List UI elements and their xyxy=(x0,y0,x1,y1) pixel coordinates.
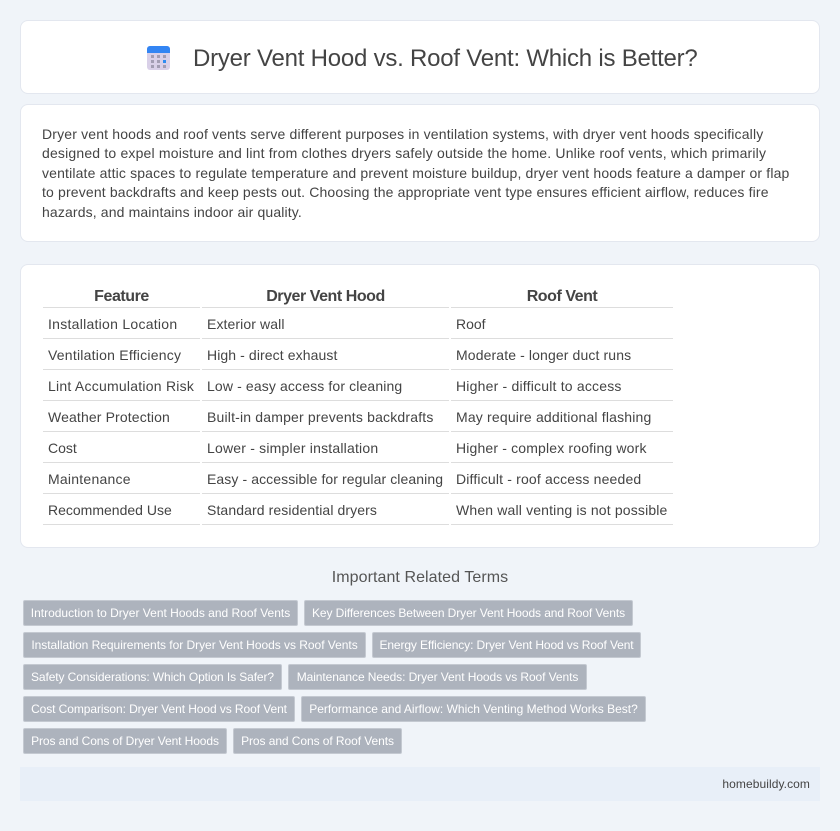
table header xyxy=(94,288,598,305)
tag: Key Differences Between Dryer Vent Hoods and Roof Vents xyxy=(312,606,625,620)
comparison table xyxy=(43,288,673,525)
table header: Roof Vent xyxy=(527,288,597,305)
title: Dryer Vent Hood vs. Roof Vent: Which is Better? xyxy=(193,45,698,72)
intro text: to prevent backdrafts and keep pests out. Choosing the appropriate vent type ensures efficient airflow, reduces fire xyxy=(42,184,769,200)
tag xyxy=(23,600,298,626)
tag xyxy=(304,600,633,626)
row: installation location: Roof xyxy=(456,316,486,332)
row: recommended use: Standard residential dryers xyxy=(207,502,377,518)
row: weather protection: Built-in damper prevents backdrafts xyxy=(207,409,434,425)
row: weather protection xyxy=(48,409,651,425)
row: weather protection: Weather Protection xyxy=(48,409,170,425)
heading: important related terms: Important Related Terms xyxy=(332,569,508,586)
tag xyxy=(23,728,227,754)
tag: Cost Comparison: Dryer Vent Hood vs Roof Vent xyxy=(31,702,287,716)
footer bar xyxy=(20,767,820,801)
row: installation location: Installation Location xyxy=(48,316,177,332)
row: lint accumulation risk: Lint Accumulation Risk xyxy=(48,378,194,394)
panel: comparison table xyxy=(20,264,820,548)
icon: calendar xyxy=(147,46,170,70)
row: maintenance: Easy - accessible for regular cleaning xyxy=(207,471,443,487)
tag xyxy=(23,664,282,690)
tag xyxy=(23,632,366,658)
related term tags xyxy=(23,600,646,754)
header card xyxy=(20,20,820,94)
tag xyxy=(233,728,402,754)
row: lint accumulation risk xyxy=(48,378,622,394)
row: ventilation efficiency: Ventilation Efficiency xyxy=(48,347,181,363)
table header: Feature xyxy=(94,288,149,305)
row: recommended use: Recommended Use xyxy=(48,502,172,518)
tag xyxy=(301,696,646,722)
row: weather protection: May require additional flashing xyxy=(456,409,651,425)
row: installation location: Exterior wall xyxy=(207,316,285,332)
row: lint accumulation risk: Low - easy access for cleaning xyxy=(207,378,402,394)
intro text: hazards, and maintains indoor air quality. xyxy=(42,204,302,220)
intro text xyxy=(42,126,790,220)
intro text: ventilate attic spaces to regulate temperature and prevent moisture buildup, dryer vent hoods feature a damper or flap xyxy=(42,165,790,181)
tag xyxy=(288,664,587,690)
footer credit: homebuildy.com xyxy=(722,777,810,791)
row: lint accumulation risk: Higher - difficult to access xyxy=(456,378,622,394)
row: cost: Cost xyxy=(48,440,77,456)
tag xyxy=(23,696,295,722)
row: recommended use: When wall venting is not possible xyxy=(456,502,668,518)
row: cost: Lower - simpler installation xyxy=(207,440,378,456)
tag: Installation Requirements for Dryer Vent Hoods vs Roof Vents xyxy=(31,638,358,652)
row: recommended use xyxy=(48,502,668,518)
tag: Performance and Airflow: Which Venting Method Works Best? xyxy=(309,702,638,716)
table header: Dryer Vent Hood xyxy=(266,288,385,305)
row: maintenance: Maintenance xyxy=(48,471,131,487)
tag xyxy=(372,632,641,658)
tag: Maintenance Needs: Dryer Vent Hoods vs Roof Vents xyxy=(297,670,578,684)
row: maintenance xyxy=(48,471,641,487)
row: maintenance: Difficult - roof access needed xyxy=(456,471,641,487)
tag: Safety Considerations: Which Option Is Safer? xyxy=(31,670,274,684)
tag: Pros and Cons of Dryer Vent Hoods xyxy=(31,734,219,748)
panel: intro paragraph xyxy=(20,104,820,242)
row: ventilation efficiency: High - direct exhaust xyxy=(207,347,338,363)
intro text: designed to expel moisture and lint from clothes dryers safely outside the home. Unlike roof vents, which primarily xyxy=(42,145,766,161)
tag: Energy Efficiency: Dryer Vent Hood vs Roof Vent xyxy=(379,638,634,652)
row: ventilation efficiency xyxy=(48,347,631,363)
row: cost xyxy=(48,440,647,456)
row: installation location xyxy=(48,316,486,332)
row: cost: Higher - complex roofing work xyxy=(456,440,647,456)
intro text: Dryer vent hoods and roof vents serve different purposes in ventilation systems, with dryer vent hoods specifically xyxy=(42,126,763,142)
tag: Pros and Cons of Roof Vents xyxy=(241,734,394,748)
row: ventilation efficiency: Moderate - longer duct runs xyxy=(456,347,631,363)
tag: Introduction to Dryer Vent Hoods and Roof Vents xyxy=(31,606,290,620)
